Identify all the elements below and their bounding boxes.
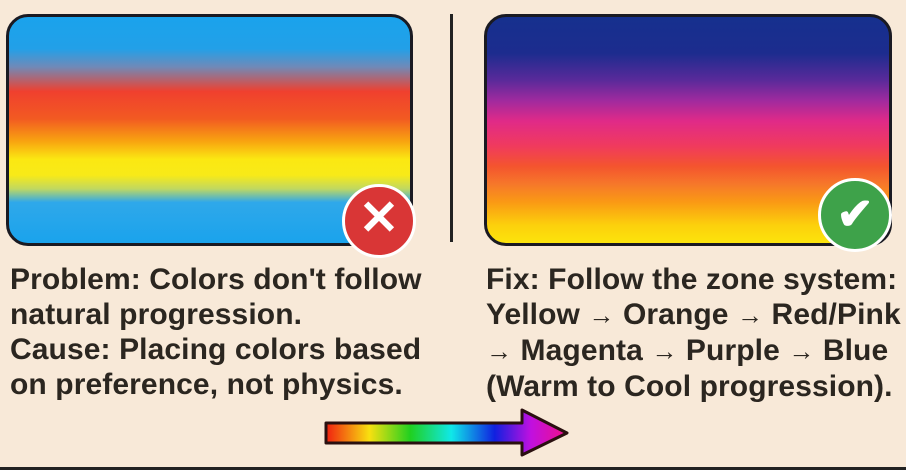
text: problem: Cause: Placing colors based xyxy=(10,333,421,366)
icon: red X xyxy=(342,184,416,258)
text: fix: Fix: Follow the zone system: xyxy=(486,263,897,296)
text: problem xyxy=(10,263,422,401)
panel: fix gradient xyxy=(484,14,892,246)
text: fix xyxy=(486,263,901,403)
arrow: spectrum xyxy=(324,408,569,457)
text: problem: on preference, not physics. xyxy=(10,368,403,401)
text: fix: (Warm to Cool progression). xyxy=(486,370,893,403)
icon: green check xyxy=(818,178,892,252)
text: fix: Yellow → Orange → Red/Pink xyxy=(486,298,901,331)
divider xyxy=(450,14,453,242)
icon: green check: ✔ xyxy=(837,190,873,239)
text: problem: natural progression. xyxy=(10,298,302,331)
panel: problem gradient xyxy=(6,14,413,246)
icon: red X: ✕ xyxy=(359,192,399,245)
text: fix: → Magenta → Purple → Blue xyxy=(486,334,888,367)
text: problem: Problem: Colors don't follow xyxy=(10,263,422,296)
